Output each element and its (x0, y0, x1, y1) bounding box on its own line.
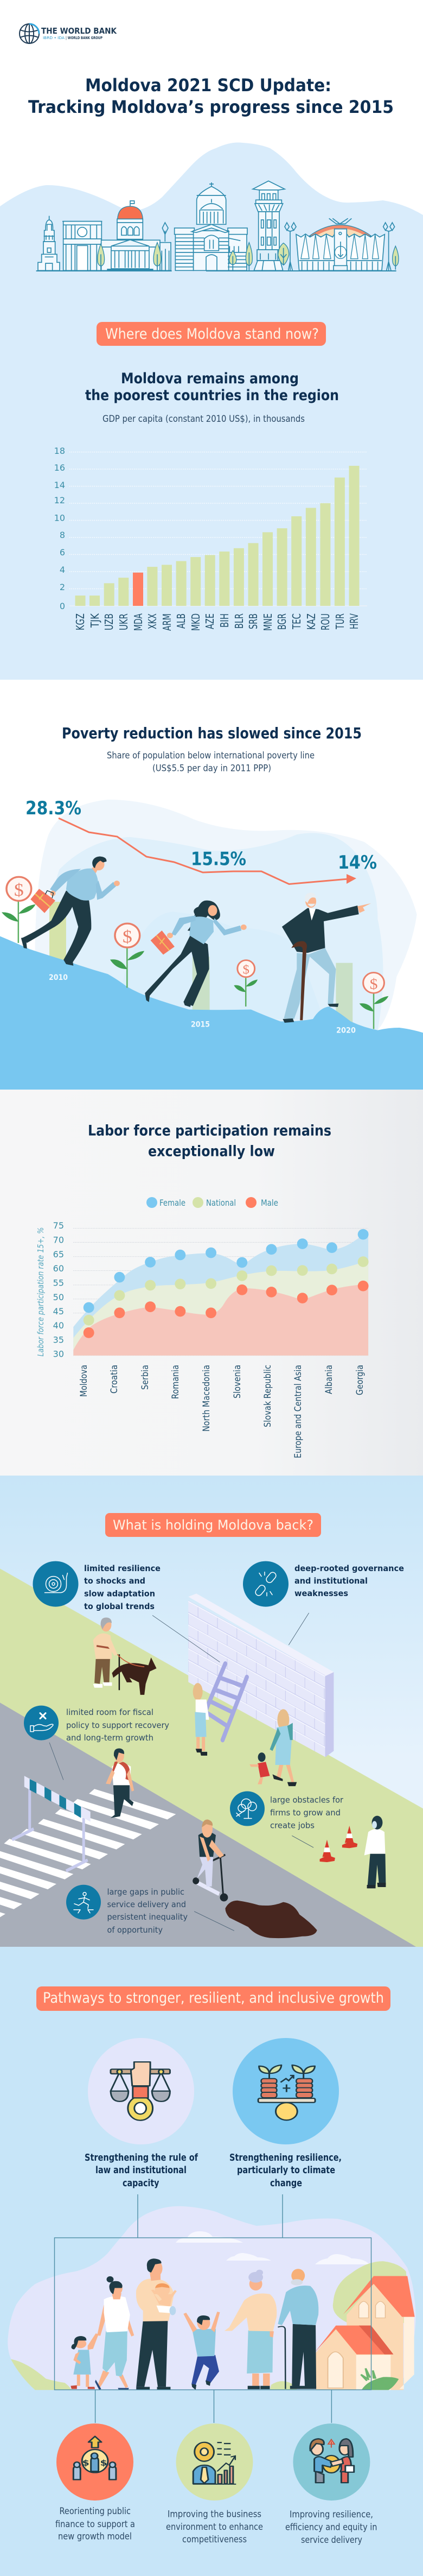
pathway: resilience: Strengthening resilience, (229, 2152, 342, 2163)
legend: Female (159, 1198, 185, 1208)
area chart (73, 1228, 369, 1356)
person: girl (70, 2333, 99, 2389)
pathway: rule of law: law and institutional (95, 2164, 187, 2176)
logo: The World Bank: | WORLD BANK GROUP (66, 36, 102, 41)
y-axis labels: 30 (53, 1349, 64, 1359)
pathway: resilience: change (270, 2178, 302, 2189)
heading: labor force: Labor force participation remains (88, 1123, 331, 1139)
clouds (176, 2231, 370, 2264)
icon: broken chain (243, 1561, 289, 1607)
bars (75, 466, 359, 606)
person: grandfather with cane (278, 2269, 318, 2389)
country labels: Slovenia (232, 1365, 243, 1398)
pathway: public finance (55, 2423, 135, 2542)
y-axis labels: 8 (60, 530, 65, 540)
icon: tree and axe (230, 1792, 265, 1826)
pathway: resilience (229, 2038, 342, 2189)
barrier 1: resilience: limited resilience (84, 1564, 161, 1573)
pathway: rule of law: capacity (123, 2178, 159, 2189)
male area (73, 1284, 368, 1356)
bar chart: GDP per capita (54, 446, 367, 631)
year labels: 2020 (336, 1027, 356, 1035)
heading: labor force (88, 1123, 331, 1160)
pathway: business environment: competitiveness (182, 2534, 247, 2545)
icon: plants on coins (258, 2065, 315, 2120)
plant 2 (110, 923, 144, 988)
person: man with dog (93, 1618, 157, 1695)
banner: pathways: Pathways to stronger, resilient, and inclusive growth (43, 1990, 384, 2007)
pathway: business environment (166, 2423, 263, 2545)
poverty values: 15.5% (191, 849, 246, 870)
poverty illustration (0, 800, 423, 1091)
subtitle: share of population: Share of population below international poverty line (107, 750, 315, 761)
barrier 2: governance: and institutional (294, 1576, 368, 1586)
y-axis labels: 0 (60, 601, 65, 611)
barrier 1: resilience (33, 1561, 161, 1611)
country labels: Slovak Republic (262, 1365, 273, 1427)
legend: Male (261, 1198, 278, 1208)
pathway: public finance: finance to support a (55, 2519, 135, 2530)
pathway: rule of law (85, 2038, 198, 2189)
icon: globe (20, 24, 39, 43)
pathway: business environment: environment to enhance (166, 2522, 263, 2533)
heading: labor force: exceptionally low (148, 1143, 275, 1160)
y-axis labels: 18 (54, 446, 65, 456)
x-axis labels: KGZ (74, 613, 87, 630)
legend: National (206, 1198, 236, 1208)
icon: business growth (193, 2442, 236, 2484)
panel: light blue hill background (0, 142, 423, 680)
person: woman at ladder (193, 1683, 209, 1756)
year labels: 2015 (191, 1021, 210, 1029)
banner: pathways (36, 1986, 390, 2011)
x-axis labels: TEC (290, 613, 303, 630)
barrier 5: public services: persistent inequality (107, 1912, 188, 1922)
barrier 3: fiscal policy: limited room for fiscal (66, 1707, 153, 1717)
connector lines and frame (54, 2194, 371, 2423)
skyline left: bell tower, triumphal arch, cathedral (36, 201, 172, 271)
x-axis labels: TUR (334, 613, 347, 630)
barrier 1: resilience: to global trends (84, 1602, 155, 1611)
legend (146, 1197, 278, 1208)
heading: poorest countries (85, 370, 339, 404)
pathway: public finance: Reorienting public (60, 2506, 131, 2517)
barrier 5: public services: large gaps in public (107, 1887, 184, 1897)
barrier (12, 1776, 91, 1871)
pathway: rule of law: Strengthening the rule of (85, 2152, 198, 2163)
y-axis labels: 40 (53, 1320, 64, 1331)
country labels: Romania (170, 1365, 181, 1399)
person: man with backpack (106, 1749, 134, 1818)
y-axis labels: 45 (53, 1306, 64, 1317)
brick wall (188, 1593, 334, 1757)
person: running woman with briefcase (145, 901, 247, 1007)
y-axis labels: 35 (53, 1334, 64, 1345)
x-axis labels: SRB (247, 613, 260, 629)
national dots (84, 1256, 369, 1325)
person: man with mask (364, 1816, 386, 1888)
person: boy (183, 2312, 220, 2390)
traffic cones (320, 1826, 357, 1862)
street scene (0, 1568, 423, 1947)
plant 4 (360, 973, 388, 1029)
y-axis labels (54, 446, 65, 611)
icon: snail (33, 1561, 78, 1607)
country labels: Moldova (79, 1365, 89, 1397)
y-axis labels: 70 (53, 1235, 64, 1245)
country labels: Europe and Central Asia (293, 1365, 304, 1458)
plant 3: $ (243, 963, 249, 977)
x-axis labels: XKX (146, 613, 159, 629)
pathway: service delivery (285, 2423, 377, 2546)
x-axis labels: UKR (117, 613, 130, 630)
pathway: service delivery: efficiency and equity in (285, 2522, 377, 2533)
barrier 2: governance: weaknesses (294, 1588, 348, 1598)
plant 1 (2, 877, 36, 943)
female area (73, 1231, 368, 1356)
road (0, 1702, 417, 1947)
plant 3 (234, 960, 258, 1007)
y-axis labels (53, 1220, 64, 1359)
heading: poorest countries: the poorest countries in the region (85, 387, 339, 404)
banner: what is holding Moldova back (105, 1513, 321, 1537)
year bars (49, 902, 352, 1023)
panel: pathways (0, 1947, 423, 2576)
logo: The World Bank: THE WORLD BANK (41, 26, 117, 36)
icon: people and money (73, 2436, 116, 2479)
leader lines (49, 1613, 313, 1931)
y-axis labels: 60 (53, 1263, 64, 1274)
x-axis labels: ARM (161, 613, 174, 631)
x-axis labels: TJK (88, 613, 101, 628)
plant 4: $ (370, 976, 377, 992)
heading: poverty reduction: Poverty reduction has slowed since 2015 (62, 724, 362, 742)
pathway: service delivery: Improving resilience, (290, 2509, 373, 2520)
green hills (11, 2261, 410, 2390)
barrier 1: resilience: to shocks and (84, 1576, 145, 1586)
barrier 3: fiscal policy (24, 1706, 169, 1743)
y-axis labels: 12 (54, 495, 65, 505)
x-axis labels: BGR (275, 613, 289, 630)
y-axis labels: 50 (53, 1292, 64, 1302)
panel: labor force (0, 1090, 423, 1476)
plant 1: $ (14, 880, 24, 900)
x-axis labels: MKD (189, 613, 202, 631)
male dots (84, 1281, 369, 1338)
background blobs (35, 800, 417, 1030)
y-axis labels: 65 (53, 1249, 64, 1259)
barrier 4: obstacles for firms: firms to grow and (270, 1808, 341, 1818)
year labels (49, 973, 356, 1035)
person: scooter rider (193, 1819, 228, 1901)
plant 2: $ (123, 927, 132, 947)
gridlines (69, 452, 367, 588)
ground (0, 936, 423, 1091)
country labels: North Macedonia (201, 1365, 212, 1432)
subtitle: share of population: (US$5.5 per day in 2011 PPP) (152, 763, 271, 774)
icon: hand with cross (24, 1706, 59, 1740)
pathway: service delivery: service delivery (301, 2535, 362, 2546)
person: mother (95, 2276, 134, 2390)
banner: what is holding Moldova back: What is holding Moldova back? (113, 1517, 313, 1533)
person: old man with cane pointing (282, 893, 371, 1023)
barrier 4: obstacles for firms: large obstacles for (270, 1795, 344, 1805)
x-axis labels: HRV (348, 613, 361, 629)
icon: handshake and gear (310, 2439, 354, 2483)
x-axis labels: MDA (132, 613, 145, 631)
barrier 1: resilience: slow adaptation (84, 1588, 155, 1598)
houses (315, 2276, 415, 2390)
icon: runner jumping gap (66, 1885, 101, 1920)
barrier 2: governance (243, 1561, 404, 1607)
barrier 4: obstacles for firms (230, 1792, 344, 1831)
country labels: Georgia (355, 1365, 366, 1395)
skyline right: church, water tower, lamps, circus (175, 181, 399, 271)
gridlines (73, 1228, 368, 1356)
title: Tracking Moldova’s progress since 2015 (28, 97, 394, 117)
national area (73, 1260, 368, 1356)
pathway: resilience: particularly to climate (237, 2164, 335, 2176)
y-axis labels: 75 (53, 1220, 64, 1231)
trend arrow (59, 818, 356, 884)
x-axis labels (74, 613, 361, 631)
sidewalk (0, 1568, 423, 1947)
pathway: business environment: Improving the business (168, 2509, 261, 2520)
puddle (225, 1901, 317, 1938)
barrier 5: public services (66, 1885, 188, 1935)
pathway: public finance: new growth model (58, 2531, 132, 2542)
poverty values: 28.3% (25, 798, 81, 819)
lavender blob background (8, 2206, 416, 2390)
title: Moldova 2021 SCD Update: (85, 75, 331, 96)
barrier 2: governance: deep-rooted governance (294, 1564, 404, 1573)
x-axis labels: MNE (261, 613, 274, 631)
x-axis labels: BLR (233, 613, 246, 629)
y-axis labels: 6 (60, 547, 65, 558)
subtitle: GDP per capita: GDP per capita (constant 2010 US$), in thousands (102, 414, 305, 425)
barrier 5: public services: of opportunity (107, 1925, 163, 1935)
title (28, 75, 394, 117)
icon: people and money: $ (100, 2458, 107, 2467)
y-axis labels: 2 (60, 582, 65, 592)
panel: what is holding Moldova back (0, 1476, 423, 1947)
poverty values (25, 798, 377, 874)
year labels: 2010 (49, 973, 68, 982)
barrier 4: obstacles for firms: create jobs (270, 1821, 315, 1831)
x-axis labels: ROU (319, 613, 332, 630)
heading: poorest countries: Moldova remains among (121, 370, 299, 387)
logo: The World Bank (20, 24, 117, 43)
y-axis labels: 16 (54, 463, 65, 473)
family illustration (11, 2258, 415, 2390)
icon: scales and gear (111, 2062, 170, 2121)
y-axis labels: 10 (54, 512, 65, 523)
banner: where does Moldova stand now: Where does Moldova stand now? (105, 326, 319, 343)
country labels: Croatia (109, 1365, 120, 1394)
icon: people and money: $ (82, 2458, 89, 2467)
x-axis labels: UZB (102, 613, 116, 630)
money plants (2, 877, 388, 1029)
person: grandmother (225, 2270, 277, 2389)
x-axis labels: AZE (203, 613, 216, 629)
barrier 3: fiscal policy: and long-term growth (66, 1733, 153, 1743)
skyline illustration (36, 181, 399, 271)
person: running man with briefcase (21, 857, 120, 966)
x-axis labels: KAZ (305, 613, 318, 630)
person: mother and child (249, 1709, 297, 1786)
country labels: Albania (324, 1365, 335, 1394)
x-axis labels: BIH (218, 613, 231, 628)
person: father with baby (136, 2258, 177, 2390)
y-axis labels: 55 (53, 1278, 64, 1288)
subtitle: share of population (107, 750, 315, 774)
ladder (205, 1663, 247, 1740)
y-axis labels: 4 (60, 565, 65, 575)
x-axis labels: ALB (175, 613, 188, 629)
poverty values: 14% (338, 852, 377, 874)
banner: where does Moldova stand now (97, 322, 326, 346)
country labels: Serbia (140, 1365, 151, 1390)
country labels (79, 1365, 366, 1458)
barrier 5: public services: service delivery and (107, 1900, 186, 1909)
female dots (84, 1229, 369, 1313)
barrier 3: fiscal policy: policy to support recovery (66, 1720, 169, 1730)
y-axis labels: 14 (54, 480, 65, 490)
axis title: Labor force participation rate 15+, % (36, 1227, 46, 1357)
logo: The World Bank: IBRD • IDA (43, 36, 65, 40)
crosswalk (0, 1789, 176, 1919)
